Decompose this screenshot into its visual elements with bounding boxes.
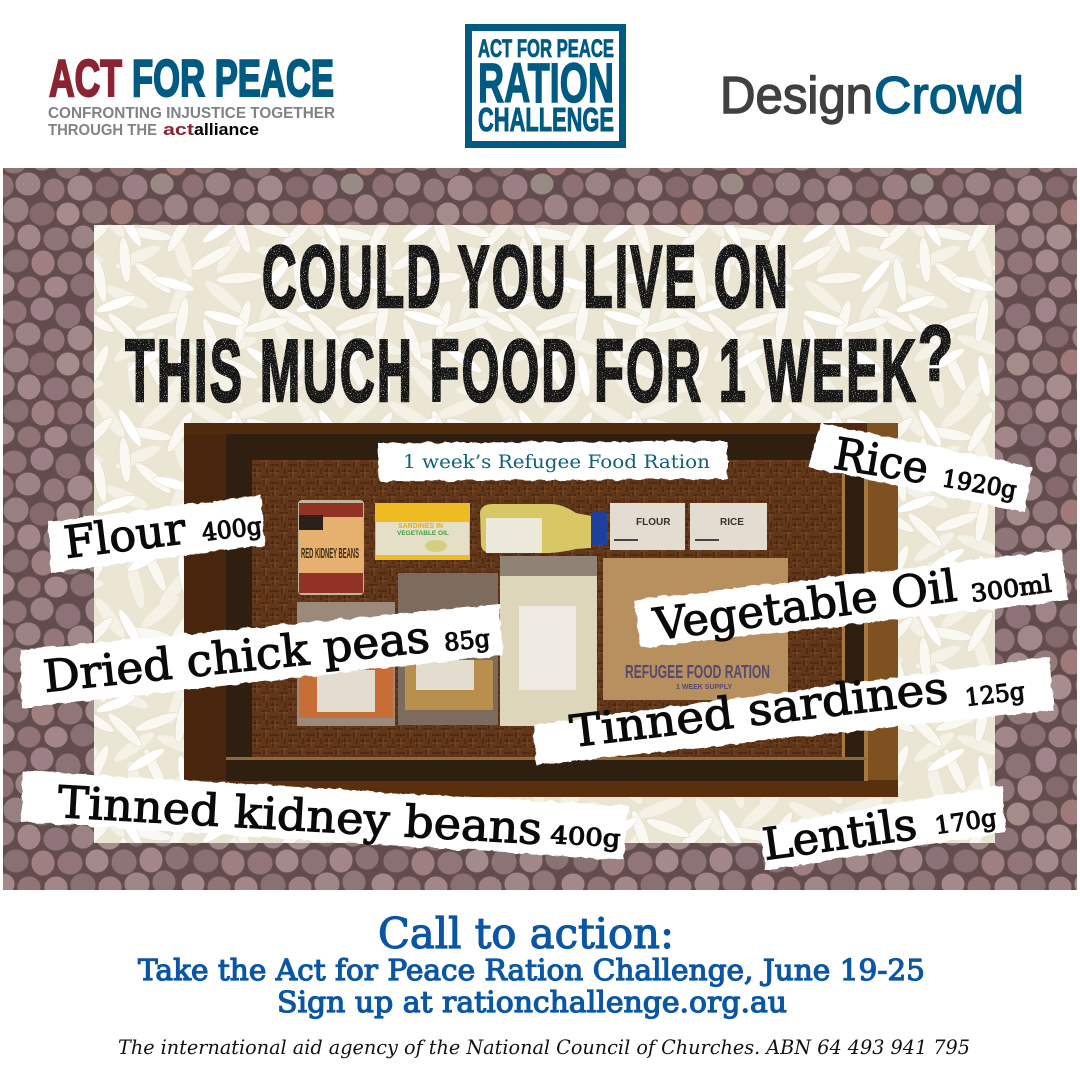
item: rice voucher	[690, 503, 767, 550]
logo: Ration Challenge: ACT FOR PEACE	[478, 35, 614, 63]
item: sardines box	[375, 503, 470, 560]
label: Vegetable Oil 300ml	[634, 550, 1068, 651]
logo: Act for Peace	[48, 50, 335, 139]
item: flour voucher: FLOUR	[636, 517, 671, 528]
panel: lentil background	[3, 168, 1077, 890]
item: refugee food ration carton: 1 WEEK SUPPLY	[676, 684, 732, 691]
item: refugee food ration carton	[603, 558, 788, 700]
label: Tinned kidney beans 400g: 400g	[550, 821, 621, 853]
label: Tinned kidney beans 400g: Tinned kidney beans	[56, 777, 543, 855]
item: flour voucher	[610, 503, 685, 550]
logo: Act for Peace: ACT	[49, 50, 122, 108]
label: Flour 400g	[48, 495, 265, 573]
panel: rice background	[94, 225, 995, 843]
logo: DesignCrowd: Design	[720, 67, 873, 125]
title	[125, 227, 956, 420]
label: Lentils 170g: 170g	[933, 804, 998, 840]
label: Dried chick peas 85g: Dried chick peas	[41, 612, 432, 703]
label: Vegetable Oil 300ml: Vegetable Oil	[650, 561, 960, 651]
label: Tinned sardines 125g: 125g	[963, 677, 1026, 712]
label: Lentils 170g: Lentils	[759, 799, 920, 871]
label: Rice 1920g: Rice	[830, 429, 932, 495]
item: tinned kidney beans	[298, 500, 364, 595]
label: Tinned kidney beans 400g	[21, 771, 628, 860]
label: Lentils 170g	[759, 785, 1005, 871]
item: sardines box: SARDINES IN	[398, 523, 443, 530]
label: Dried chick peas 85g: 85g	[443, 624, 491, 657]
logo: Ration Challenge	[468, 28, 622, 144]
label: Flour 400g: 400g	[200, 512, 263, 547]
logo: DesignCrowd	[720, 67, 1024, 125]
logo: Ration Challenge: RATION	[478, 51, 614, 114]
call to action	[138, 909, 925, 1019]
logo: DesignCrowd: Crowd	[874, 67, 1024, 125]
item: bag of chick peas	[398, 573, 498, 725]
footer note: The international aid agency of the National Council of Churches. ABN 64 493 941 795	[118, 1035, 970, 1059]
call to action: Call to action:	[378, 909, 674, 958]
logo: Act for Peace: CONFRONTING INJUSTICE TOGETHER	[48, 105, 335, 122]
item: vegetable oil bottle	[480, 504, 607, 553]
photo: ration items on woven tray: RED KIDNEY BEANS	[301, 545, 359, 562]
label: Vegetable Oil 300ml: 300ml	[969, 570, 1053, 608]
item: bag of lentils	[297, 602, 395, 726]
logo: Act for Peace: act	[163, 120, 194, 139]
label: Rice 1920g	[808, 423, 1032, 512]
photo: ration items on woven tray	[184, 423, 898, 797]
label: Tinned sardines 125g	[533, 657, 1054, 765]
item: sardines box: VEGETABLE OIL	[397, 530, 449, 537]
label: Tinned sardines 125g: Tinned sardines	[567, 662, 951, 758]
logo: Ration Challenge: CHALLENGE	[478, 101, 614, 138]
item: rice voucher: RICE	[720, 517, 744, 528]
logo: Act for Peace: alliance	[194, 120, 259, 139]
logo: Act for Peace: THROUGH THE	[48, 122, 157, 139]
label: 1 week's Refugee Food Ration: 1 week’s Refugee Food Ration	[403, 451, 710, 473]
label: 1 week's Refugee Food Ration	[378, 441, 728, 481]
item: bag of rice	[500, 556, 597, 726]
title: ?	[918, 309, 956, 397]
call to action: Sign up at rationchallenge.org.au	[277, 985, 787, 1019]
logo: Act for Peace: FOR PEACE	[132, 50, 334, 108]
item: refugee food ration carton: REFUGEE FOOD RATION	[625, 662, 770, 682]
label: Flour 400g: Flour	[61, 503, 189, 569]
call to action: Take the Act for Peace Ration Challenge, June 19-25	[138, 953, 925, 987]
label: Dried chick peas 85g	[20, 604, 503, 708]
label: Rice 1920g: 1920g	[940, 464, 1019, 504]
